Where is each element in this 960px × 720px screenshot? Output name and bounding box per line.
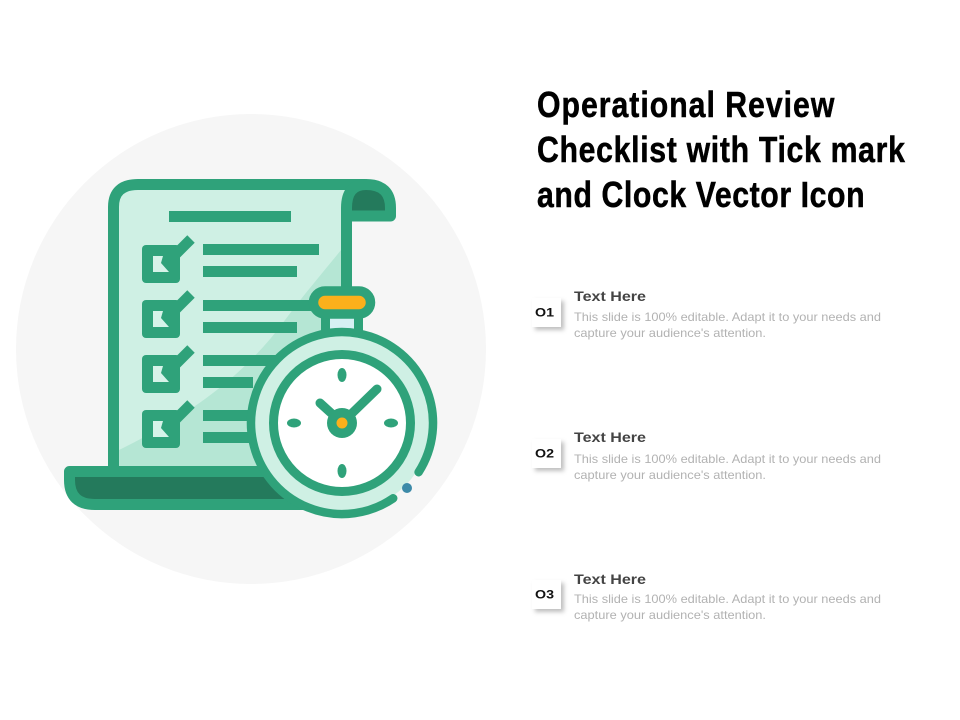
text block 01: Text Here	[574, 288, 646, 304]
text block 02: capture your audience's attention.	[574, 468, 766, 482]
outer ring	[251, 332, 433, 514]
dial	[274, 354, 410, 492]
text block 01	[574, 288, 881, 340]
number badge 01	[532, 298, 561, 327]
checklist item 3	[142, 349, 319, 393]
text block 02: This slide is 100% editable. Adapt it to your needs and	[574, 452, 881, 466]
paper sheet	[114, 184, 390, 472]
crown button	[314, 291, 370, 314]
document heading line	[169, 211, 291, 222]
checklist item 1	[142, 239, 319, 283]
text block 02: Text Here	[574, 429, 646, 445]
text block 03: Text Here	[574, 571, 646, 587]
number badge 02: O2	[535, 448, 554, 460]
stem	[326, 312, 358, 334]
text block 03: This slide is 100% editable. Adapt it to your needs and	[574, 592, 881, 606]
document base	[70, 472, 320, 504]
list item 03	[532, 571, 881, 622]
title	[537, 86, 905, 216]
title: and Clock Vector Icon	[537, 176, 865, 216]
hour ticks	[287, 368, 398, 478]
centre hub	[327, 408, 357, 438]
title: Operational Review	[537, 86, 834, 126]
text block 01: This slide is 100% editable. Adapt it to your needs and	[574, 310, 881, 324]
number badge 01: O1	[535, 308, 555, 320]
icon: stopwatch	[251, 291, 433, 514]
title: Checklist with Tick mark	[537, 131, 905, 171]
text block 02	[574, 429, 881, 482]
blue dot	[402, 483, 412, 493]
number badge 03	[532, 580, 561, 609]
list item 02	[532, 429, 881, 482]
checklist item 4	[142, 404, 263, 448]
background circle	[16, 114, 486, 584]
checklist item 2	[142, 294, 319, 338]
text block 03: capture your audience's attention.	[574, 608, 766, 622]
clock hands	[320, 389, 377, 423]
number badge 02	[532, 439, 561, 468]
number badge 03: O3	[535, 590, 554, 602]
list item 01	[532, 288, 881, 340]
watch body	[253, 334, 431, 512]
text block 03	[574, 571, 881, 622]
icon: checklist document	[70, 184, 390, 504]
text block 01: capture your audience's attention.	[574, 326, 766, 340]
